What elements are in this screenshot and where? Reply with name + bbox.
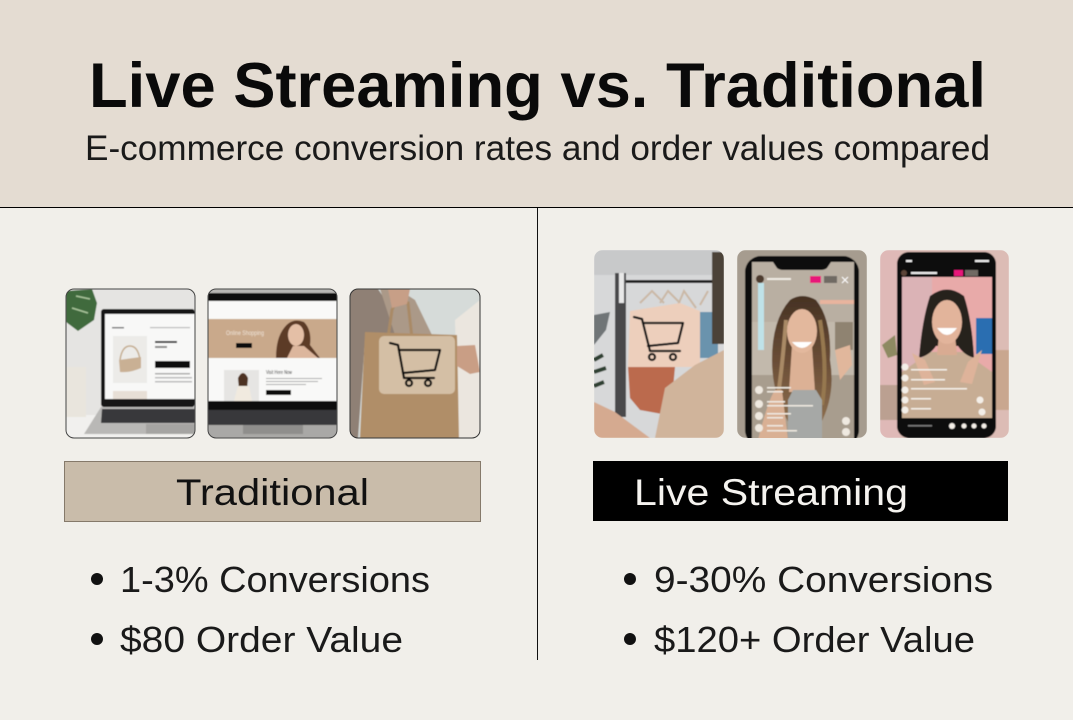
photo: laptop product page [66, 289, 195, 438]
photo: laptop online shop [208, 289, 337, 438]
photo: phone livestream host one [737, 250, 867, 446]
title: Live Streaming vs. Traditional [89, 51, 986, 121]
badge: traditional: Traditional [176, 472, 369, 513]
bullet: order value: $80 Order Value [120, 619, 403, 660]
bullet: order value: $120+ Order Value [654, 619, 975, 660]
header band [0, 0, 1073, 207]
photo: phone livestream host two [880, 250, 1009, 438]
subtitle: E-commerce conversion rates and order values compared [85, 129, 990, 168]
badge: live streaming: Live Streaming [634, 472, 908, 513]
photo: shopping bag with cart [350, 289, 480, 438]
icon: cart [390, 343, 440, 386]
badge: live streaming [593, 461, 1008, 521]
badge: traditional [64, 462, 480, 522]
photo: laptop online shop: Visit Here Now [266, 370, 292, 376]
bullet: conversions: 9-30% Conversions [654, 559, 993, 600]
photo: laptop online shop: Online Shopping [226, 331, 264, 337]
photo: clothing rack with cart [594, 250, 724, 438]
icon: cart [634, 317, 683, 360]
panel: live streaming [593, 250, 1009, 660]
bullet: conversions: 1-3% Conversions [120, 559, 430, 600]
panel: traditional [64, 289, 480, 660]
